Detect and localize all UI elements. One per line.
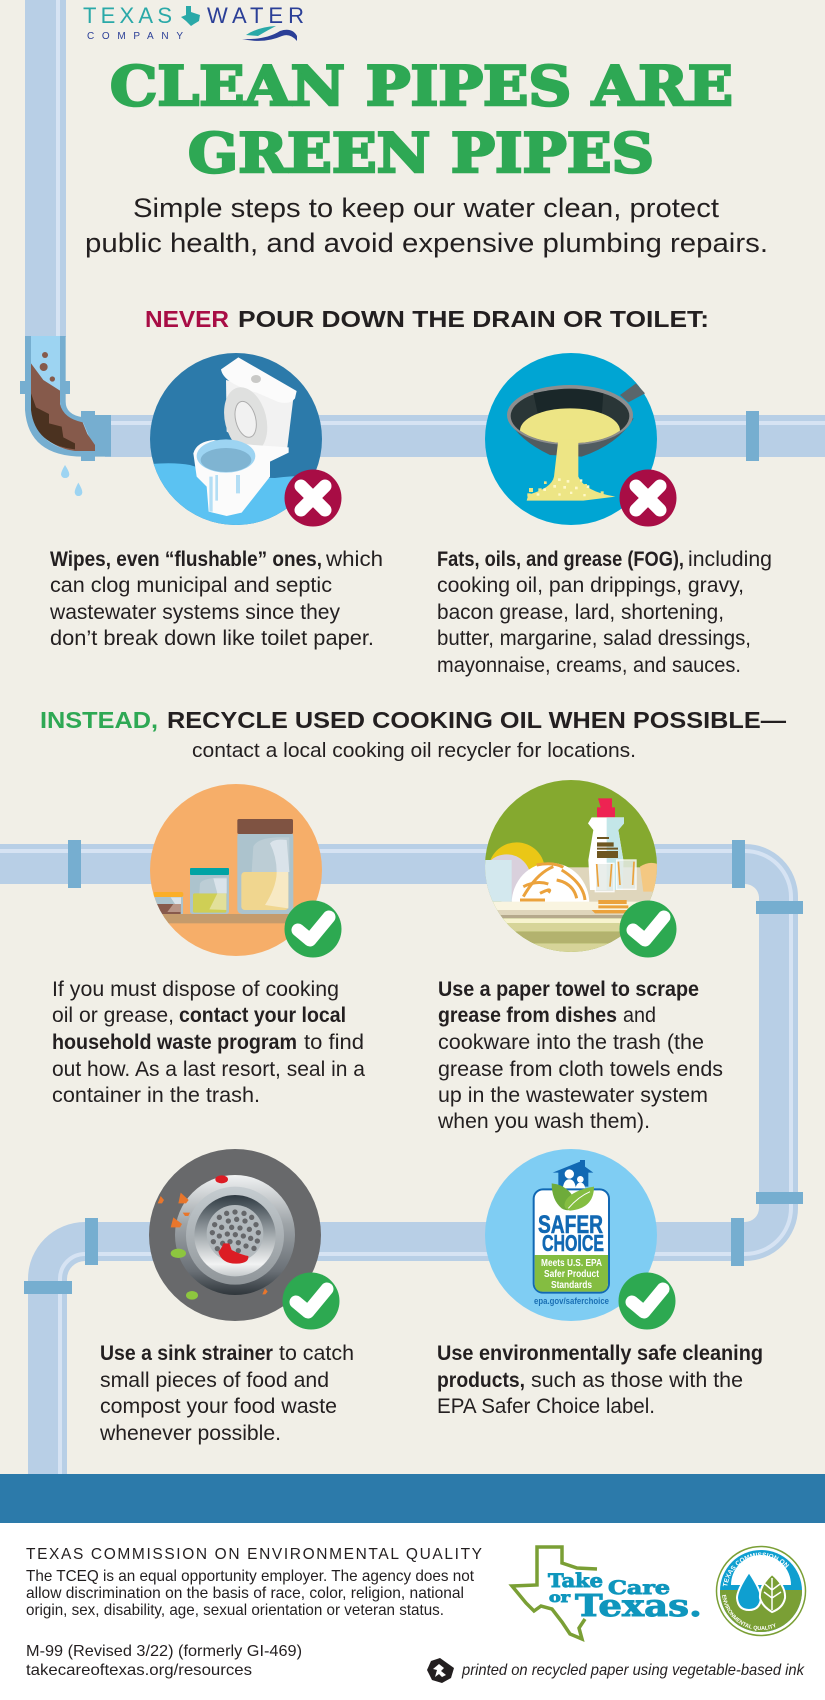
- badge: check dishes: [620, 900, 676, 958]
- text: fats oils grease: [437, 548, 772, 677]
- subtitle: [85, 193, 768, 258]
- text: fats oils grease: cooking oil, pan drippings, gravy,: [437, 574, 744, 597]
- text: paper towel: cookware into the trash (the: [438, 1031, 704, 1054]
- icon: sink strainer: [149, 1149, 321, 1321]
- text: paper towel: Use a paper towel to scrape: [438, 978, 699, 1001]
- text: cleaning products: EPA Safer Choice label.: [437, 1395, 655, 1418]
- text: sink strainer: whenever possible.: [99, 1422, 281, 1445]
- logo: TCEQ seal: [716, 1546, 806, 1636]
- text: fats oils grease: butter, margarine, salad dressings,: [437, 627, 751, 650]
- text: paper towel: grease from cloth towels ends: [438, 1058, 723, 1081]
- footer: blue band: [0, 1474, 825, 1523]
- text: wipes: [49, 548, 383, 650]
- footer: agency text: TEXAS COMMISSION ON ENVIRONMENTAL QUALITY: [26, 1546, 482, 1563]
- text: fats oils grease: mayonnaise, creams, and sauces.: [437, 654, 741, 677]
- subheading: contact recycler: contact a local cooking oil recycler for locations.: [192, 740, 636, 762]
- text: wipes: don’t break down like toilet paper.: [50, 627, 374, 650]
- title: [110, 54, 733, 185]
- logo: Texas Water Company: COMPANY: [87, 31, 183, 42]
- title: GREEN PIPES: [188, 121, 654, 185]
- text: household waste: If you must dispose of cooking: [52, 978, 339, 1001]
- text: household waste: household waste program: [52, 1031, 297, 1054]
- text: household waste: [52, 978, 365, 1107]
- heading: never: NEVER: [145, 306, 229, 332]
- text: household waste: contact your local: [179, 1004, 346, 1027]
- icon: safer choice label: CHOICE: [542, 1230, 604, 1256]
- text: sink strainer: compost your food waste: [100, 1395, 337, 1418]
- icon: safer choice label: epa.gov/saferchoice: [534, 1296, 609, 1306]
- title: CLEAN PIPES ARE: [110, 54, 733, 118]
- text: sink strainer: small pieces of food and: [100, 1369, 329, 1392]
- subtitle: public health, and avoid expensive plumbing repairs.: [85, 228, 768, 258]
- logo: Texas Water Company: [83, 3, 304, 42]
- footer: publication info: takecareoftexas.org/resources: [26, 1662, 252, 1679]
- logo: Take Care of Texas: [512, 1547, 702, 1639]
- badge: check safer choice: [618, 1272, 676, 1330]
- badge: check jars: [284, 900, 342, 958]
- text: cleaning products: [437, 1342, 763, 1418]
- badge: check strainer: [282, 1272, 340, 1330]
- text: paper towel: up in the wastewater system: [438, 1084, 708, 1107]
- logo: Texas Water Company: TEXAS: [83, 3, 172, 28]
- footer: publication info: M-99 (Revised 3/22) (formerly GI-469): [26, 1643, 302, 1660]
- text: wipes: can clog municipal and septic: [50, 574, 332, 597]
- footer: agency text: The TCEQ is an equal opportunity employer. The agency does not: [26, 1568, 475, 1585]
- icon: safer choice label: SAFER: [538, 1211, 603, 1239]
- text: household waste: out how. As a last resort, seal in a: [52, 1058, 365, 1081]
- footer: agency text: allow discrimination on the basis of race, color, religion, national: [26, 1585, 464, 1602]
- badge: X pan: [620, 470, 676, 526]
- pipe: upper horizontal: [105, 411, 825, 461]
- footer: agency text: origin, sex, disability, age, sexual orientation or veteran status.: [26, 1602, 444, 1619]
- footer: printed on recycled paper: printed on recycled paper using vegetable-based ink: [461, 1662, 805, 1679]
- icon: safer choice label: Meets U.S. EPA: [541, 1258, 602, 1269]
- logo: Take Care of Texas: or: [549, 1590, 571, 1606]
- text: fats oils grease: Fats, oils, and grease (FOG),: [437, 548, 684, 571]
- logo: Texas Water Company: WATER: [207, 3, 304, 28]
- pipe: clogged elbow: [20, 336, 111, 496]
- text: paper towel: and: [623, 1004, 656, 1027]
- logo: Take Care of Texas: Take: [548, 1570, 603, 1592]
- logo: Take Care of Texas: Care: [608, 1577, 670, 1599]
- text: paper towel: grease from dishes: [438, 1004, 617, 1027]
- text: wipes: which: [325, 548, 383, 571]
- heading: instead: RECYCLE USED COOKING OIL WHEN POSSIBLE—: [167, 707, 787, 733]
- text: cleaning products: such as those with the: [531, 1369, 743, 1392]
- icon: safer choice label: Safer Product: [544, 1269, 600, 1280]
- text: paper towel: when you wash them).: [437, 1110, 650, 1133]
- icon: jars of oil: [150, 784, 322, 956]
- icon: safer choice label: [485, 1149, 657, 1321]
- text: fats oils grease: bacon grease, lard, shortening,: [437, 601, 724, 624]
- text: paper towel: [437, 978, 723, 1133]
- footer: publication info: [26, 1643, 302, 1679]
- text: fats oils grease: including: [688, 548, 772, 571]
- text: household waste: oil or grease,: [52, 1004, 174, 1027]
- subtitle: Simple steps to keep our water clean, protect: [133, 193, 720, 223]
- text: cleaning products: products,: [437, 1369, 525, 1392]
- text: household waste: to find: [304, 1031, 364, 1054]
- icon: greasy dishes: [483, 780, 663, 953]
- text: household waste: container in the trash.: [52, 1084, 260, 1107]
- pipe: top vertical: [25, 0, 66, 337]
- pipe: serpentine lower run: [0, 840, 803, 1474]
- logo: TCEQ seal: TEXAS COMMISSION ON: [722, 1552, 790, 1586]
- text: cleaning products: Use environmentally safe cleaning: [437, 1342, 763, 1365]
- icon: safer choice label: Standards: [551, 1280, 592, 1291]
- text: wipes: wastewater systems since they: [49, 601, 341, 624]
- logo: Take Care of Texas: Texas.: [575, 1589, 702, 1624]
- icon: frying pan with grease: [485, 353, 657, 525]
- icon: recycled paper: [427, 1658, 454, 1683]
- text: sink strainer: Use a sink strainer: [100, 1342, 273, 1365]
- badge: X toilet: [284, 470, 342, 526]
- heading: instead: INSTEAD,: [40, 707, 158, 733]
- footer: agency text: [26, 1546, 482, 1619]
- icon: toilet: [145, 353, 330, 530]
- text: wipes: Wipes, even “flushable” ones,: [50, 548, 322, 571]
- text: sink strainer: [99, 1342, 354, 1445]
- heading: never: POUR DOWN THE DRAIN OR TOILET:: [238, 306, 709, 332]
- logo: TCEQ seal: ENVIRONMENTAL QUALITY: [722, 1594, 776, 1631]
- footer: white panel: [0, 1523, 825, 1700]
- text: sink strainer: to catch: [279, 1342, 354, 1365]
